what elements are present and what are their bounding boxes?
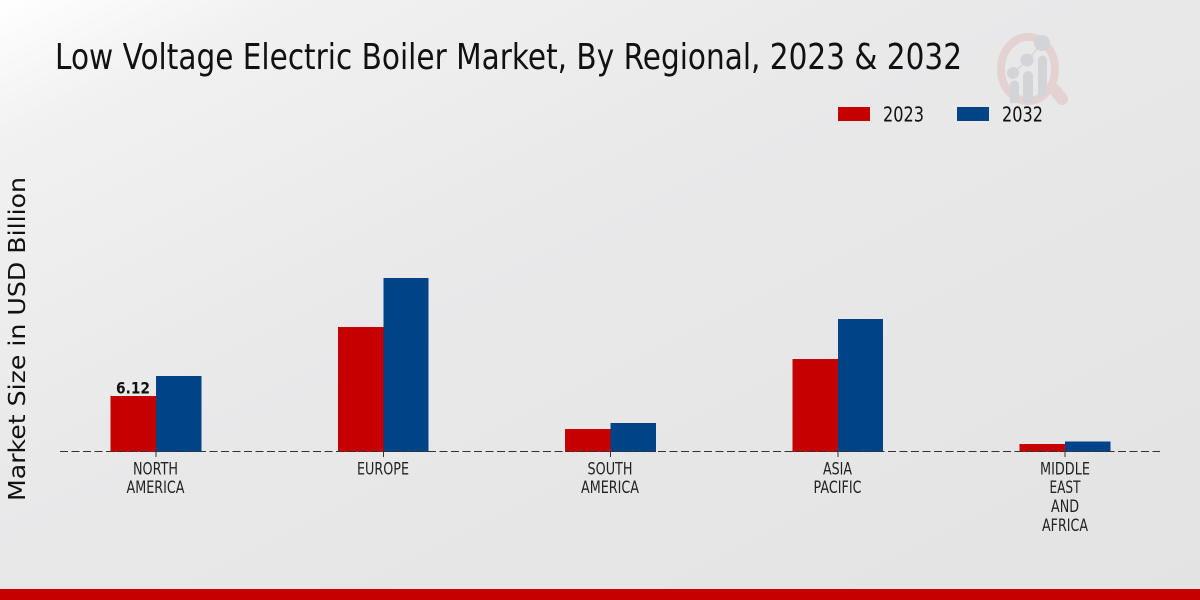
legend item: 2023 bbox=[838, 102, 924, 126]
x label: Middle East and Africa: EAST bbox=[1050, 478, 1081, 497]
legend bbox=[838, 102, 1043, 126]
legend item: 2023: 2023 bbox=[883, 102, 924, 126]
bars: Europe bbox=[338, 278, 428, 452]
data label: 6.12: 6.12 bbox=[116, 378, 150, 398]
x label: Asia Pacific: PACIFIC bbox=[814, 478, 862, 497]
bars: South America bbox=[565, 423, 656, 452]
x label: Middle East and Africa: AND bbox=[1051, 497, 1079, 516]
x label: Middle East and Africa: MIDDLE bbox=[1040, 460, 1090, 478]
legend item: 2032 bbox=[957, 102, 1043, 126]
legend item: 2032: 2032 bbox=[1002, 102, 1043, 126]
y axis label: Market Size in USD Billion bbox=[3, 177, 31, 501]
bars: North America bbox=[110, 376, 202, 452]
x label: North America: NORTH bbox=[133, 460, 178, 478]
bars: Asia Pacific bbox=[792, 319, 883, 452]
x label: North America: AMERICA bbox=[126, 478, 185, 497]
x label: South America bbox=[581, 460, 640, 497]
icon: watermark logo bbox=[1001, 35, 1062, 103]
title: Low Voltage Electric Boiler Market, By Regional, 2023 & 2032 bbox=[55, 37, 962, 78]
x label: Asia Pacific bbox=[814, 460, 862, 497]
x label: Europe: EUROPE bbox=[357, 460, 409, 478]
x label: North America bbox=[126, 460, 185, 497]
x label: South America: AMERICA bbox=[581, 478, 640, 497]
x label: Middle East and Africa bbox=[1040, 460, 1090, 535]
bars: Middle East and Africa bbox=[1020, 442, 1110, 452]
x label: Asia Pacific: ASIA bbox=[823, 460, 853, 478]
bottom red band bbox=[0, 589, 1200, 600]
x label: South America: SOUTH bbox=[588, 460, 632, 478]
x axis baseline bbox=[60, 452, 1160, 457]
x label: Middle East and Africa: AFRICA bbox=[1042, 516, 1089, 535]
